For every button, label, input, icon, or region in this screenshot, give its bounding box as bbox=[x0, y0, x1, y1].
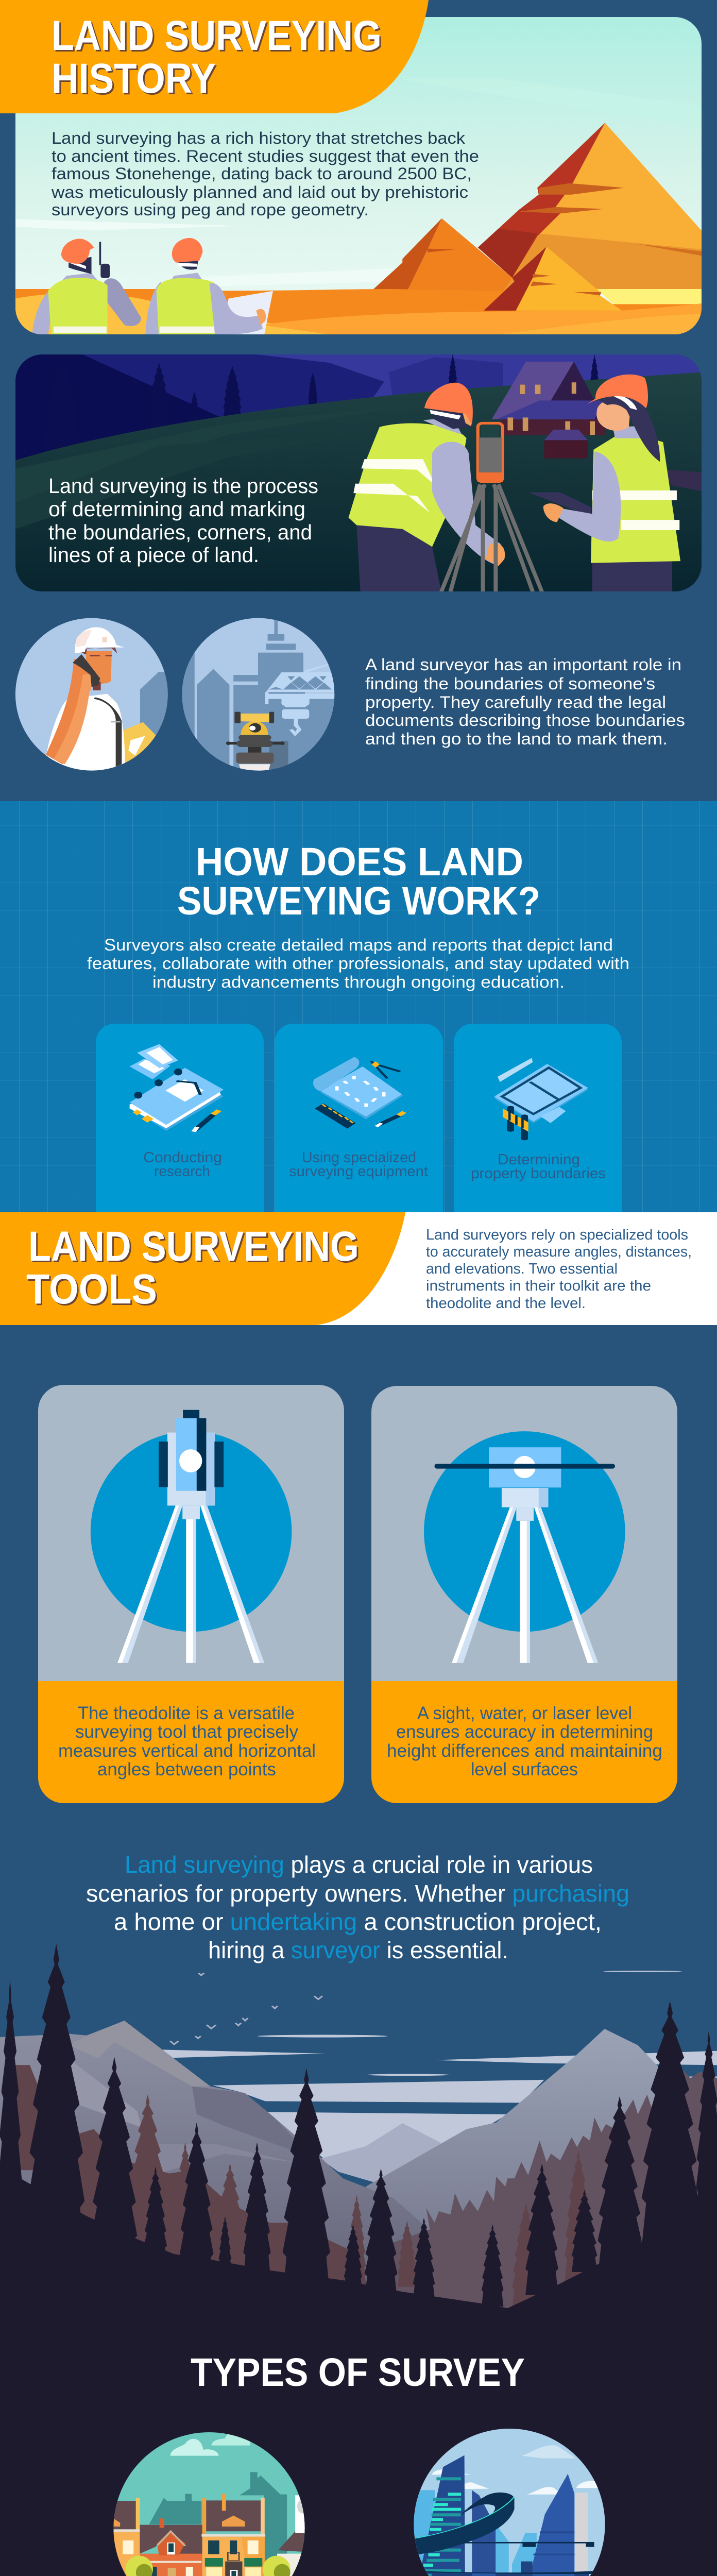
orange banner bbox=[0, 1212, 405, 1325]
icon: blueprint and tools bbox=[313, 1057, 404, 1129]
text: definition: the boundaries, corners, and bbox=[48, 520, 312, 544]
illustration: desert pyramids and surveyors bbox=[0, 15, 717, 340]
text: tools intro: theodolite and the level. bbox=[426, 1295, 586, 1312]
heading: land surveying history: HISTORY bbox=[52, 55, 216, 102]
illustration: surveyor on phone bbox=[15, 618, 170, 771]
right mountain bbox=[366, 2029, 717, 2315]
text: definition bbox=[48, 474, 318, 567]
text: determining property boundaries bbox=[471, 1151, 606, 1182]
heading: land surveying history: LAND SURVEYING bbox=[52, 12, 382, 59]
level instrument bbox=[226, 712, 288, 773]
text: tools intro bbox=[426, 1227, 692, 1312]
text: crucial role statement: a home or undertaking a construction project, bbox=[114, 1908, 602, 1935]
middle pyramid bbox=[373, 218, 512, 291]
card: level bbox=[371, 1386, 677, 1803]
farmhouse bbox=[491, 362, 606, 459]
text: using specialized equipment: Using specialized bbox=[302, 1149, 416, 1166]
left mountain bbox=[0, 2021, 425, 2315]
large pyramid bbox=[478, 123, 702, 291]
text: section intro: Surveyors also create detailed maps and reports that depict land bbox=[104, 936, 613, 954]
text: using specialized equipment bbox=[289, 1149, 428, 1180]
text: theodolite description: surveying tool that precisely bbox=[75, 1722, 298, 1742]
text: determining property boundaries: Determining bbox=[498, 1151, 580, 1168]
text: section intro: industry advancements through ongoing education. bbox=[152, 973, 565, 991]
text: surveyor role: finding the boundaries of someone's bbox=[365, 674, 655, 693]
section header: land surveying tools bbox=[0, 1212, 717, 1325]
icon: notebook and papers bbox=[130, 1044, 224, 1132]
section: types of survey bbox=[0, 2308, 717, 2576]
text: determining property boundaries: property boundaries bbox=[471, 1165, 606, 1182]
illustration: mountains and pine forest bbox=[0, 1943, 717, 2370]
survey: mortgage location bbox=[113, 2432, 305, 2576]
brown pines bbox=[17, 2065, 592, 2308]
surveyor with radio bbox=[32, 239, 141, 334]
icon: level on tripod bbox=[424, 1431, 625, 1663]
text: theodolite description: angles between points bbox=[97, 1759, 276, 1780]
brown hills bbox=[394, 2069, 717, 2315]
clouds bbox=[0, 1971, 717, 2183]
card: theodolite bbox=[38, 1385, 344, 1803]
white band bbox=[0, 1212, 717, 1325]
text: tools intro: instruments in their toolkit are the bbox=[426, 1278, 651, 1294]
green hill bbox=[15, 372, 702, 592]
illustration: city and level instrument bbox=[182, 618, 335, 773]
text: tools intro: and elevations. Two essential bbox=[426, 1261, 618, 1277]
text: tools intro: Land surveyors rely on specialized tools bbox=[426, 1227, 688, 1243]
heading: how does land surveying work bbox=[177, 840, 540, 923]
heading: land surveying tools bbox=[26, 1223, 359, 1313]
text: theodolite description: measures vertical and horizontal bbox=[58, 1741, 316, 1761]
icon: theodolite on tripod bbox=[91, 1410, 292, 1663]
small pyramid bbox=[484, 247, 622, 311]
text: level description: ensures accuracy in determining bbox=[396, 1722, 653, 1742]
card: determining property boundaries bbox=[454, 1024, 622, 1212]
text: surveyor role: documents describing those boundaries bbox=[365, 711, 685, 730]
text: conducting research: Conducting bbox=[143, 1149, 222, 1166]
surveyor at instrument bbox=[349, 383, 505, 592]
surveyor with map bbox=[145, 238, 273, 334]
illustration: surveyors at dusk bbox=[0, 351, 717, 593]
illustration: row of houses bbox=[113, 2432, 305, 2576]
text: surveyor role bbox=[365, 655, 685, 748]
dark pines bbox=[0, 1943, 717, 2307]
dark pines bbox=[43, 353, 600, 459]
text: level description: height differences and maintaining bbox=[387, 1741, 662, 1761]
text: crucial role statement: hiring a surveyor is essential. bbox=[208, 1937, 508, 1963]
text: definition: of determining and marking bbox=[48, 497, 305, 521]
text: history intro: to ancient times. Recent studies suggest that even the bbox=[52, 147, 479, 165]
text: using specialized equipment: surveying equipment bbox=[289, 1163, 428, 1180]
text: conducting research bbox=[143, 1149, 222, 1180]
birds bbox=[170, 1973, 322, 2044]
text: tools intro: to accurately measure angles, distances, bbox=[426, 1244, 692, 1260]
illustration: futuristic skyline bbox=[412, 2429, 605, 2576]
text: definition: Land surveying is the process bbox=[48, 474, 318, 498]
panel: what is land surveying bbox=[0, 351, 717, 593]
text: crucial role statement bbox=[86, 1851, 629, 1963]
panel: land surveying history bbox=[0, 0, 717, 340]
text: surveyor role: and then go to the land to mark them. bbox=[365, 730, 668, 748]
crane bbox=[265, 664, 335, 736]
text: level description: level surfaces bbox=[471, 1759, 578, 1780]
blueprint background bbox=[0, 801, 717, 1212]
text: conducting research: research bbox=[154, 1163, 210, 1180]
text: theodolite description: The theodolite is a versatile bbox=[78, 1703, 295, 1723]
total station on tripod bbox=[441, 423, 542, 592]
section: land surveyor role bbox=[15, 618, 685, 773]
surveyor with tablet bbox=[528, 375, 680, 593]
foreground dune bbox=[261, 303, 702, 334]
section: how does land surveying work bbox=[0, 801, 717, 1212]
text: surveyor role: A land surveyor has an important role in bbox=[365, 655, 681, 674]
card: conducting research bbox=[96, 1024, 264, 1212]
text: history intro: Land surveying has a rich history that stretches back bbox=[52, 129, 466, 147]
text: theodolite description bbox=[58, 1703, 316, 1780]
text: section intro bbox=[87, 936, 629, 991]
card bottom bbox=[371, 1681, 677, 1803]
heading: how does land surveying work: SURVEYING WORK? bbox=[177, 879, 540, 923]
text: history intro bbox=[51, 129, 479, 219]
text: history intro: was meticulously planned and laid out by prehistoric bbox=[51, 183, 468, 201]
card: using specialized equipment bbox=[275, 1024, 443, 1212]
heading: land surveying tools: LAND SURVEYING bbox=[28, 1223, 359, 1270]
forest floor bbox=[0, 2167, 717, 2370]
card top bbox=[371, 1386, 677, 1681]
text: crucial role statement: Land surveying plays a crucial role in various bbox=[125, 1851, 593, 1878]
heading: land surveying history bbox=[52, 12, 382, 102]
heading: types of survey: TYPES OF SURVEY bbox=[191, 2350, 525, 2395]
distant dunes bbox=[15, 289, 702, 334]
card top bbox=[38, 1385, 344, 1681]
dark background bbox=[0, 2308, 717, 2576]
text: history intro: famous Stonehenge, dating back to around 2500 BC, bbox=[52, 164, 472, 183]
heading: land surveying tools: TOOLS bbox=[26, 1266, 157, 1313]
survey: alta bbox=[412, 2429, 605, 2576]
text: level description: A sight, water, or laser level bbox=[417, 1703, 632, 1723]
text: level description bbox=[387, 1703, 662, 1780]
text: definition: lines of a piece of land. bbox=[48, 543, 259, 567]
heading: how does land surveying work: HOW DOES LAND bbox=[196, 840, 523, 884]
title banner bbox=[0, 0, 429, 113]
text: history intro: surveyors using peg and rope geometry. bbox=[52, 200, 369, 219]
icon: land parcels bbox=[494, 1058, 588, 1140]
yellow sand bbox=[597, 289, 702, 304]
text: surveyor role: property. They carefully read the legal bbox=[365, 693, 666, 711]
far mountain bbox=[320, 2123, 441, 2187]
text: section intro: features, collaborate with other professionals, and stay updated with bbox=[87, 954, 629, 973]
card bottom bbox=[38, 1681, 344, 1803]
text: crucial role statement: scenarios for property owners. Whether purchasing bbox=[86, 1880, 629, 1907]
